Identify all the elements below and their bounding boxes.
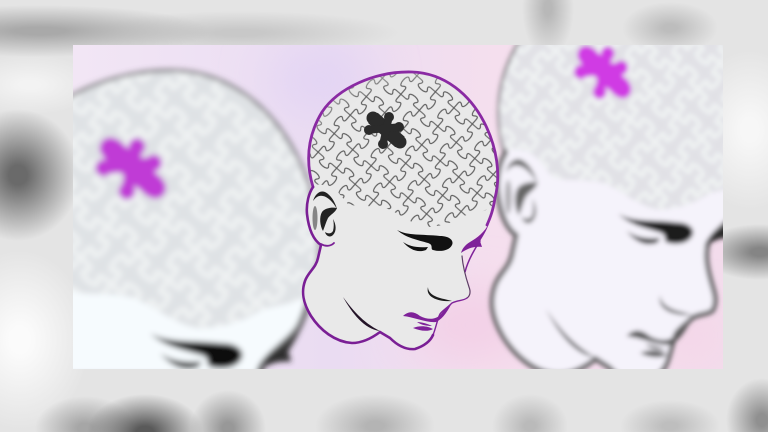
- infographic illustration: [73, 45, 723, 369]
- photo panel: [73, 45, 723, 369]
- brow: [461, 223, 489, 253]
- icon: missing puzzle piece: [364, 112, 406, 149]
- blurred left head: [73, 65, 320, 369]
- nose: [428, 287, 452, 301]
- ear: [312, 191, 337, 236]
- central head: [303, 72, 498, 349]
- head outline: [303, 72, 498, 349]
- mouth: [403, 303, 452, 331]
- head silhouette: [303, 72, 498, 349]
- blurred right head: [486, 45, 723, 369]
- jaw line: [343, 297, 380, 331]
- puzzle skull: [308, 72, 498, 227]
- eye: [397, 230, 452, 251]
